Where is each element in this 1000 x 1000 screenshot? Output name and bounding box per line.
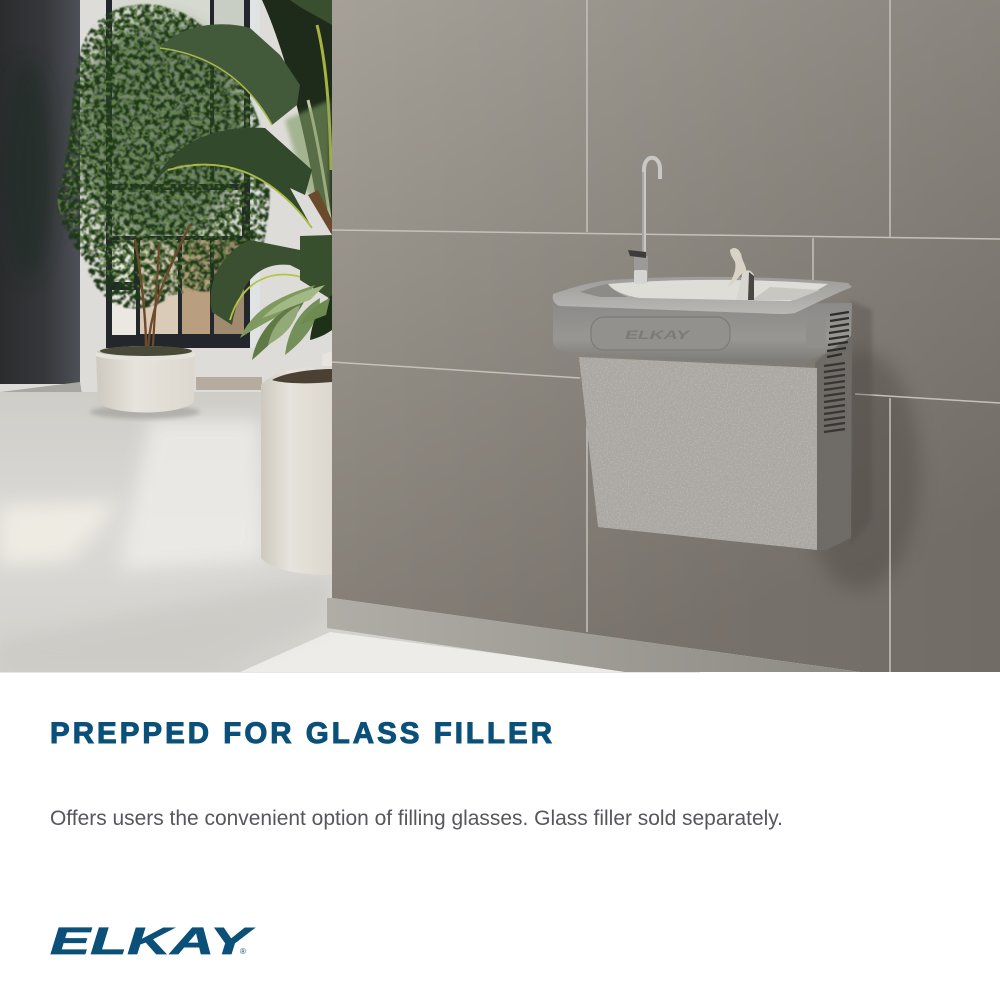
tile grout lines [332, 0, 1000, 672]
logo: Elkay: ELKAY [50, 921, 256, 963]
tree pot [96, 346, 195, 412]
logo: Elkay [50, 921, 256, 963]
basin body band [553, 303, 852, 363]
floor [0, 377, 700, 673]
panel: photo of lobby with drinking fountain [0, 0, 1000, 673]
heading: PREPPED FOR GLASS FILLER [50, 717, 552, 750]
basin bowl [608, 280, 828, 301]
lower vent slots [824, 363, 845, 432]
fern fronds [240, 285, 332, 360]
body text: Offers users the convenient option of filling glasses. Glass filler sold separately. [50, 807, 783, 830]
fountain wall shadow [850, 300, 872, 545]
tree foliage [58, 4, 270, 309]
side badge [806, 317, 826, 348]
upper vent slots [827, 312, 849, 357]
drinking fountain [553, 158, 872, 550]
logo plate [591, 317, 730, 350]
lobby background wall [0, 0, 335, 400]
banana leaves [150, 0, 332, 325]
basin rim [553, 277, 852, 314]
front speckled panel [579, 357, 817, 550]
large white planter [261, 351, 332, 575]
logo: Elkay: ® [240, 947, 246, 956]
bubbler [727, 248, 754, 300]
fountain side housing [815, 335, 852, 550]
window [106, 0, 260, 348]
logo plate: ELKAY [625, 328, 691, 342]
dark glass panel [0, 0, 82, 408]
skirting strip [327, 598, 860, 672]
glass filler faucet [628, 158, 660, 284]
tree trunks [135, 225, 190, 348]
tile wall [332, 0, 1000, 672]
